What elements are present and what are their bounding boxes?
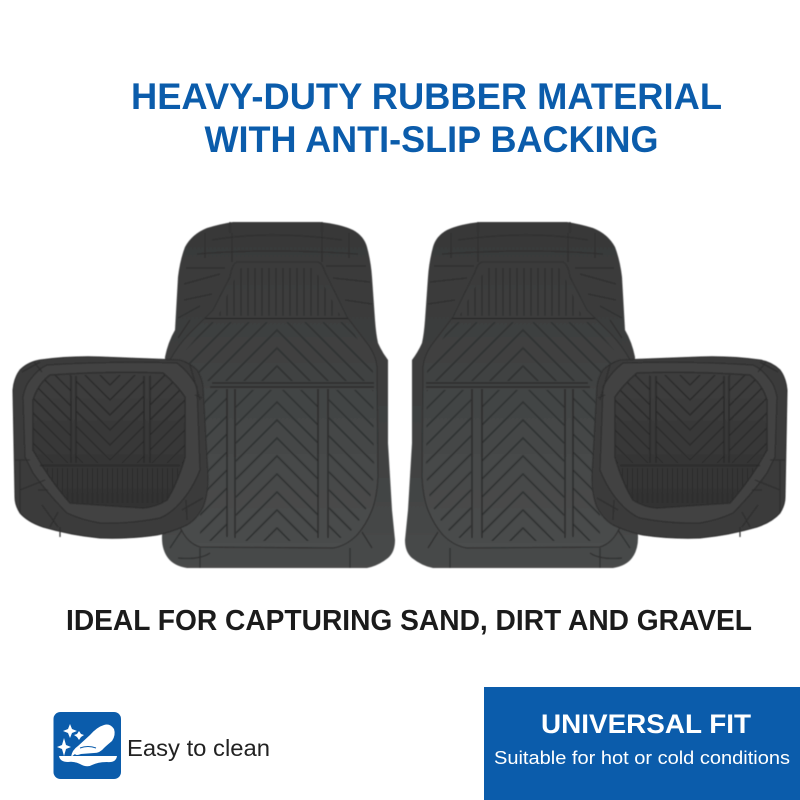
icon: hand wiping surface <box>54 712 121 779</box>
title: WITH ANTI-SLIP BACKING <box>204 118 658 160</box>
panel heading: UNIVERSAL FIT <box>541 709 752 739</box>
label: easy to clean: Easy to clean <box>127 735 270 761</box>
floor mat: left rear <box>13 357 208 538</box>
title: HEAVY-DUTY RUBBER MATERIAL <box>131 75 722 117</box>
tagline: IDEAL FOR CAPTURING SAND, DIRT AND GRAVEL <box>66 605 752 637</box>
floor mat: left front <box>162 222 395 568</box>
panel subtext: Suitable for hot or cold conditions <box>494 747 790 768</box>
floor mat: right rear <box>592 357 787 538</box>
title <box>131 75 722 160</box>
panel: universal fit <box>484 687 800 800</box>
floor mat: right front <box>405 222 638 568</box>
